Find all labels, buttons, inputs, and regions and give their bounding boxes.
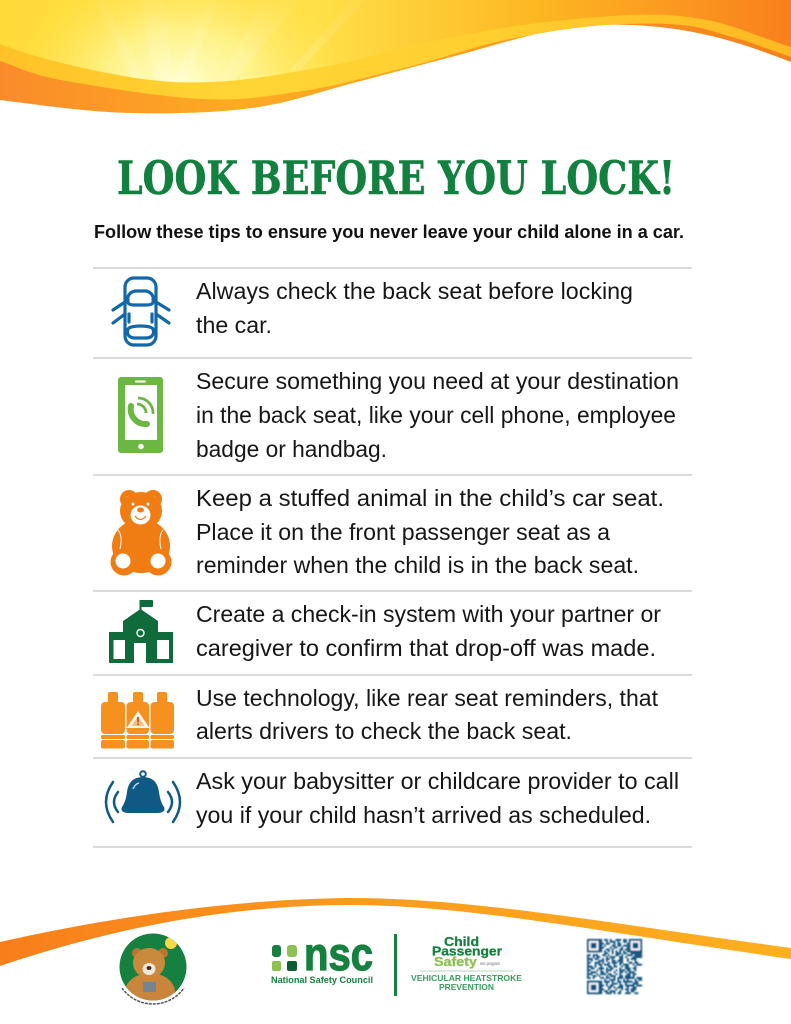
tip 6 text (196, 768, 679, 828)
tip 3 text: reminder when the child is in the back seat. (196, 552, 639, 578)
top sun wave banner (0, 0, 791, 113)
logo: Child Passenger Safety (411, 935, 522, 992)
QR code (587, 940, 642, 993)
icon: teddy bear (110, 490, 172, 576)
tip 5 text (196, 685, 658, 744)
yellow swoosh band (0, 0, 791, 99)
tip 3 text: Keep a stuffed animal in the child’s car seat. (196, 485, 664, 511)
tip 2 text (196, 368, 679, 462)
sky with sun rays (0, 0, 791, 82)
orange under-band (0, 0, 791, 113)
tip 2 text: in the back seat, like your cell phone, employee (196, 402, 676, 428)
icon: cell phone (118, 377, 163, 453)
tip 4 text: Create a check-in system with your partner or (196, 601, 661, 627)
logo: Child Passenger Safety: Passenger (432, 944, 502, 958)
logo mark (272, 945, 297, 971)
logo: Child Passenger Safety: Child (444, 935, 479, 949)
tip 1 text: Always check the back seat before locking (196, 278, 633, 304)
icon: school building (109, 600, 173, 663)
tip 6 text: you if your child hasn’t arrived as scheduled. (196, 802, 651, 828)
tip 5 text: alerts drivers to check the back seat. (196, 718, 572, 744)
logo: Child Passenger Safety: nsc program (480, 961, 500, 966)
tip 3 text: Place it on the front passenger seat as a (196, 519, 611, 545)
logo: Child Passenger Safety: PREVENTION (439, 982, 494, 992)
logo name: National Safety Council (271, 975, 373, 986)
tip 4 text (196, 601, 661, 661)
bottom orange swoosh (0, 898, 791, 966)
tip 4 text: caregiver to confirm that drop-off was made. (196, 635, 656, 661)
icon: car with open doors (113, 278, 169, 345)
icon: car seats with warning triangle (101, 692, 174, 748)
tip 1 text (196, 278, 633, 338)
badge: teddy bear in green circle (120, 934, 186, 1011)
tip 3 text (196, 485, 664, 578)
tip 5 text: Use technology, like rear seat reminders, that (196, 685, 658, 711)
tips list (93, 268, 692, 847)
tip 1 text: the car. (196, 312, 272, 338)
logo: Child Passenger Safety: Safety (434, 955, 477, 969)
tip 6 text: Ask your babysitter or childcare provider to call (196, 768, 679, 794)
subtitle: Follow these tips to ensure you never leave your child alone in a car. (94, 222, 684, 242)
tip 2 text: badge or handbag. (196, 436, 387, 462)
nsc wordmark: nsc (304, 928, 373, 980)
logo: Child Passenger Safety: VEHICULAR HEATSTROKE (411, 973, 522, 983)
icon: ringing bell (106, 771, 180, 822)
logo: National Safety Council (271, 928, 373, 986)
tip 2 text: Secure something you need at your destination (196, 368, 679, 394)
